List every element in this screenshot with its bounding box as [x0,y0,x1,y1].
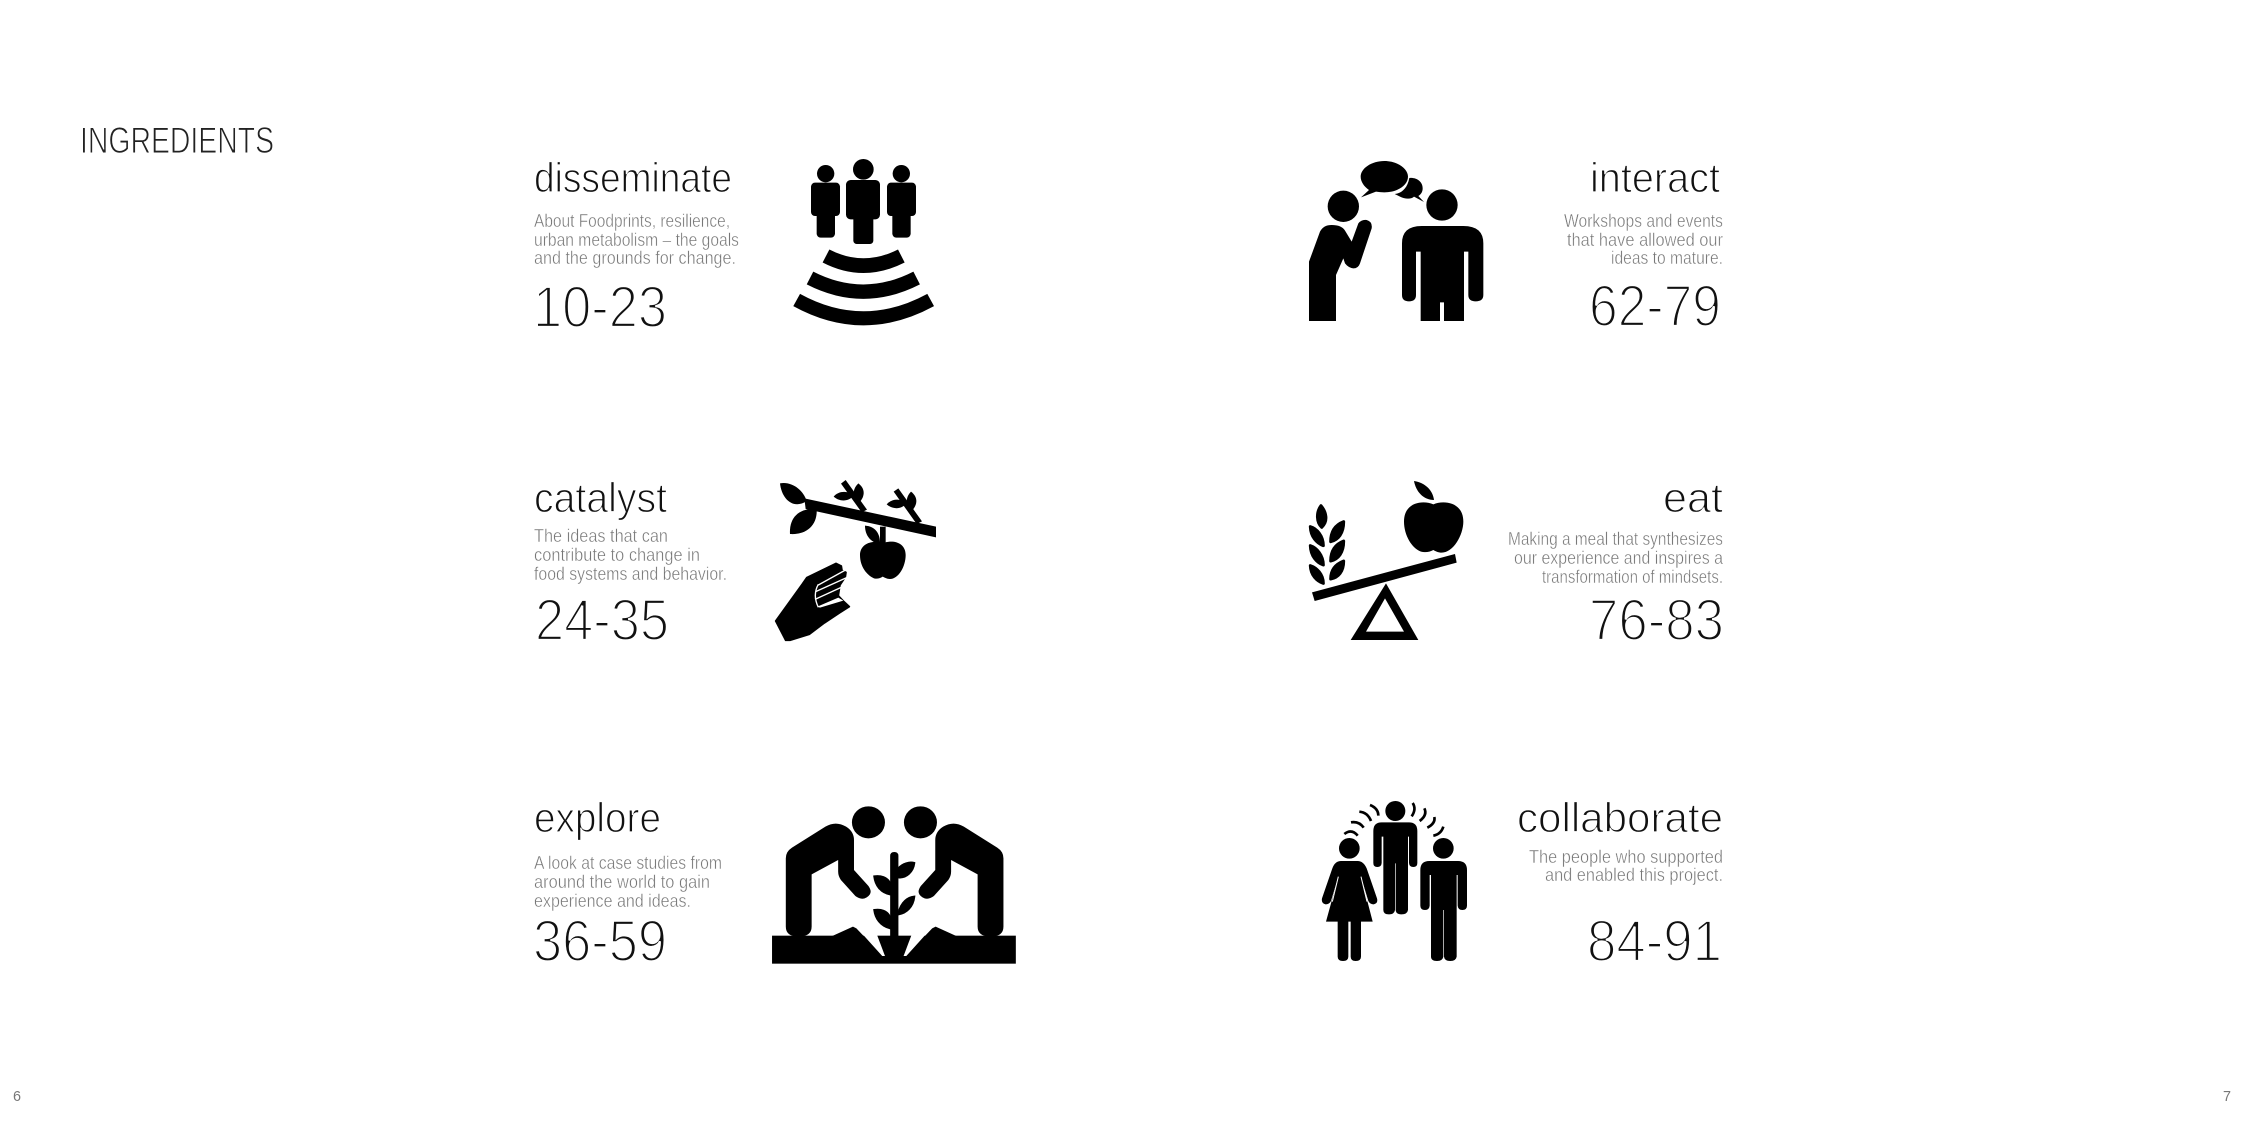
description: eat: transformation of mindsets. [1542,567,1723,587]
page range: 76-83: 76-83 [1589,588,1724,653]
page number: 6: 6 [13,1088,21,1105]
page range: 62-79: 62-79 [1589,274,1721,339]
panel: eat [1310,474,1724,653]
description: eat: Making a meal that synthesizes [1508,529,1723,549]
icon: balance with wheat and apple [1310,481,1463,640]
description: disseminate: About Foodprints, resilience, [534,211,730,231]
description: disseminate: urban metabolism – the goals [534,230,739,250]
description: interact: that have allowed our [1567,230,1723,250]
heading: explore: explore [534,794,661,841]
panel: explore [533,794,1016,974]
heading: disseminate: disseminate [534,154,732,201]
description: catalyst: contribute to change in [534,545,700,565]
page range: 36-59: 36-59 [533,909,667,974]
icon: people over broadcast waves [797,159,931,318]
page range: 24-35: 24-35 [535,588,669,653]
description: disseminate [534,211,739,268]
description: explore: experience and ideas. [534,891,691,911]
icon: two people in conversation [1309,161,1483,321]
page range: 10-23: 10-23 [533,275,667,340]
description: eat: our experience and inspires a [1514,548,1724,568]
heading: catalyst: catalyst [534,474,667,521]
description: catalyst: The ideas that can [534,526,668,546]
heading: interact: interact [1590,154,1720,201]
heading: eat: eat [1663,474,1723,521]
description: explore: A look at case studies from [534,853,722,873]
panel: catalyst [534,474,936,653]
description: collaborate: The people who supported [1529,847,1723,867]
description: collaborate: and enabled this project. [1545,865,1723,885]
heading: collaborate: collaborate [1517,794,1723,841]
description: catalyst [534,526,727,584]
description: interact: Workshops and events [1564,211,1723,231]
description: explore: around the world to gain [534,872,710,892]
panel: collaborate [1322,794,1723,974]
description: interact [1564,211,1723,268]
description: disseminate: and the grounds for change. [534,248,736,268]
icon: three people connected by signal arcs [1322,801,1467,961]
title: INGREDIENTS [80,120,274,161]
page range: 84-91: 84-91 [1587,909,1722,974]
description: collaborate [1529,847,1723,885]
description: catalyst: food systems and behavior. [534,564,727,584]
panel: interact [1309,154,1723,339]
icon: hand reaching for apple on branch [776,480,936,640]
page number: 7: 7 [2223,1088,2231,1105]
description: interact: ideas to mature. [1611,248,1723,268]
description: explore [534,853,722,911]
icon: two people planting a seedling [772,806,1016,964]
description: eat [1508,529,1724,587]
panel: disseminate [533,154,931,340]
